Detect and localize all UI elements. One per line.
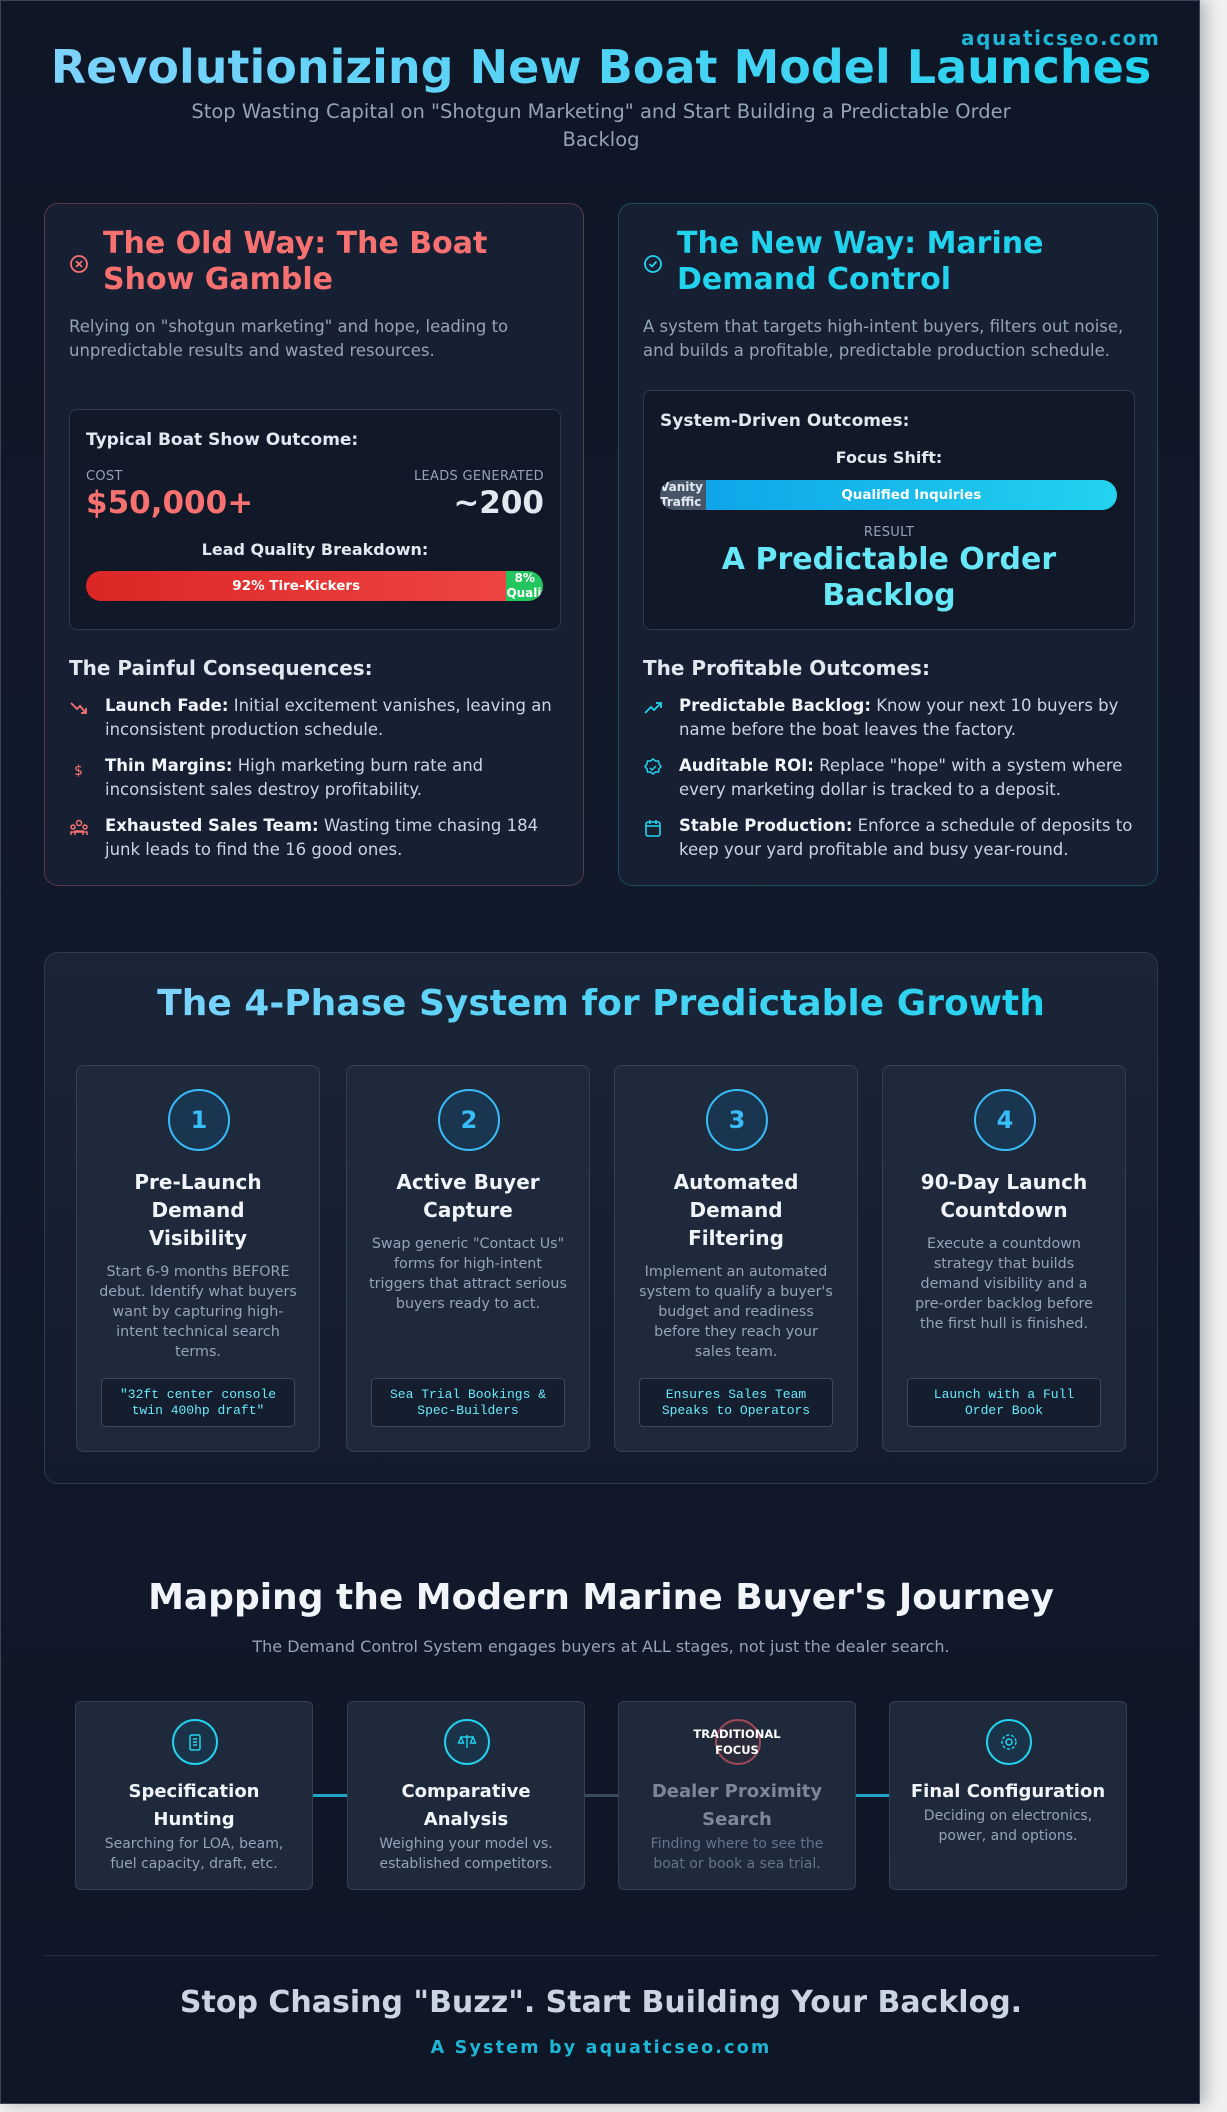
journey: dealer proximity: Dealer Proximity Search — [652, 1781, 822, 1830]
phase 1: Start 6-9 months BEFORE debut. Identify what buyers want by capturing high-intent technical search terms. — [99, 1264, 297, 1360]
journey: comparative — [347, 1701, 585, 1890]
list: outcomes: Stable Production: Enforce a schedule of deposits to keep your yard profitable and busy year-round. — [679, 816, 1132, 859]
subtitle: Stop Wasting Capital on "Shotgun Marketing" and Start Building a Predictable Order Backlog — [191, 100, 1011, 151]
phase 2: 2 — [461, 1106, 477, 1134]
journey: dealer proximity: TRADITIONAL — [693, 1727, 781, 1741]
panel: old way — [44, 203, 584, 886]
bar: focus shift — [660, 480, 1117, 510]
journey: final config — [889, 1701, 1127, 1890]
outcome box: LEADS GENERATED — [414, 469, 544, 484]
journey subtitle: The Demand Control System engages buyers at ALL stages, not just the dealer search. — [252, 1637, 950, 1656]
phase 1 — [76, 1065, 320, 1452]
stat: leads: ~200 — [453, 485, 544, 521]
journey: final config: Deciding on electronics, power, and options. — [924, 1808, 1092, 1844]
outcome box: Focus Shift: — [836, 448, 942, 467]
outcome box: Typical Boat Show Outcome: — [86, 430, 358, 450]
panel: new way — [618, 203, 1158, 886]
journey: spec hunting — [75, 1701, 313, 1890]
heading: consequences: The Painful Consequences: — [69, 656, 373, 680]
phase 4: Launch with a Full Order Book — [934, 1386, 1074, 1418]
footer headline: Stop Chasing "Buzz". Start Building Your Backlog. — [180, 1985, 1022, 2020]
bar: focus shift: Traffic — [660, 495, 701, 509]
journey: comparative: Weighing your model vs. established competitors. — [379, 1836, 553, 1872]
description: A system that targets high-intent buyers, filters out noise, and builds a profitable, predictable production schedule. — [643, 317, 1123, 360]
heading: outcomes: The Profitable Outcomes: — [643, 656, 930, 680]
list: outcomes — [644, 696, 1132, 859]
outcome box: System-Driven Outcomes: — [660, 411, 909, 431]
list: consequences: Launch Fade: Initial excitement vanishes, leaving an inconsistent production schedule. — [105, 696, 552, 739]
phase 3: 3 — [729, 1106, 745, 1134]
bar: lead quality: 92% Tire-Kickers — [232, 578, 360, 594]
phase 3: Ensures Sales Team Speaks to Operators — [662, 1386, 810, 1418]
phase 4: 90-Day Launch Countdown — [921, 1170, 1087, 1222]
outcome box — [643, 390, 1135, 630]
journey: comparative: Comparative Analysis — [401, 1781, 531, 1830]
journey: dealer proximity: FOCUS — [715, 1743, 759, 1757]
list: outcomes: Auditable ROI: Replace "hope" with a system where every marketing dollar is tracked to a deposit. — [679, 756, 1122, 799]
phase 1: "32ft center console twin 400hp draft" — [120, 1386, 276, 1418]
result text: A Predictable Order Backlog — [722, 542, 1056, 613]
connectors — [313, 1794, 347, 1797]
outcome box: COST — [86, 469, 123, 484]
journey: spec hunting: Specification Hunting — [128, 1781, 260, 1830]
title: Revolutionizing New Boat Model Launches — [51, 40, 1151, 94]
phase 4: 4 — [997, 1106, 1013, 1134]
journey: final config: Final Configuration — [911, 1781, 1105, 1802]
bar: focus shift: Vanity — [660, 480, 703, 494]
journey: dealer proximity: Finding where to see the boat or book a sea trial. — [651, 1836, 823, 1872]
journey: spec hunting: Searching for LOA, beam, fuel capacity, draft, etc. — [105, 1836, 283, 1872]
phase 3: Automated Demand Filtering — [674, 1170, 798, 1250]
phase 2: Active Buyer Capture — [396, 1170, 540, 1222]
heading: The 4-Phase System for Predictable Growth — [157, 983, 1045, 1024]
outcome box — [69, 409, 561, 630]
heading: The Old Way: The Boat Show Gamble — [103, 226, 487, 297]
phase 4: Execute a countdown strategy that builds demand visibility and a pre-order backlog before the first hull is finished. — [915, 1236, 1093, 1332]
description: Relying on "shotgun marketing" and hope, leading to unpredictable results and wasted resources. — [69, 317, 508, 360]
icon: check circle — [644, 255, 662, 273]
footer byline: A System by aquaticseo.com — [431, 2038, 771, 2058]
phase 3: Implement an automated system to qualify a buyer's budget and readiness before they reach your sales team. — [639, 1264, 833, 1360]
icon: x circle — [70, 255, 88, 273]
phase 1: 1 — [191, 1106, 207, 1134]
phase 2: Sea Trial Bookings & Spec-Builders — [390, 1386, 546, 1418]
list: consequences — [70, 696, 552, 859]
phase 1: Pre-Launch Demand Visibility — [134, 1170, 262, 1250]
stat: cost: $50,000+ — [86, 485, 253, 521]
outcome box: RESULT — [864, 525, 914, 540]
domain label: aquaticseo.com — [961, 26, 1160, 50]
journey: dealer proximity — [618, 1701, 856, 1890]
list: consequences: Exhausted Sales Team: Wasting time chasing 184 junk leads to find the 16 good ones. — [105, 816, 538, 859]
phase 3 — [614, 1065, 858, 1452]
list: consequences: Thin Margins: High marketing burn rate and — [105, 756, 483, 775]
bar: lead quality — [86, 571, 543, 601]
list: outcomes: Predictable Backlog: Know your next 10 buyers by name before the boat leaves the factory. — [679, 696, 1118, 739]
phase 2: Swap generic "Contact Us" forms for high-intent triggers that attract serious buyers ready to act. — [369, 1236, 567, 1312]
outcome box: Lead Quality Breakdown: — [202, 540, 428, 559]
bar: focus shift: Qualified Inquiries — [841, 487, 981, 503]
phase 2 — [346, 1065, 590, 1452]
divider — [44, 1955, 1158, 1956]
bar: lead quality: 8% — [515, 571, 535, 585]
heading: buyer journey: Mapping the Modern Marine Buyer's Journey — [148, 1577, 1054, 1618]
panel: 4-phase system — [44, 952, 1158, 1484]
phase 4 — [882, 1065, 1126, 1452]
list: consequences: inconsistent sales destroy profitability. — [105, 780, 422, 799]
heading: The New Way: Marine Demand Control — [677, 226, 1043, 297]
